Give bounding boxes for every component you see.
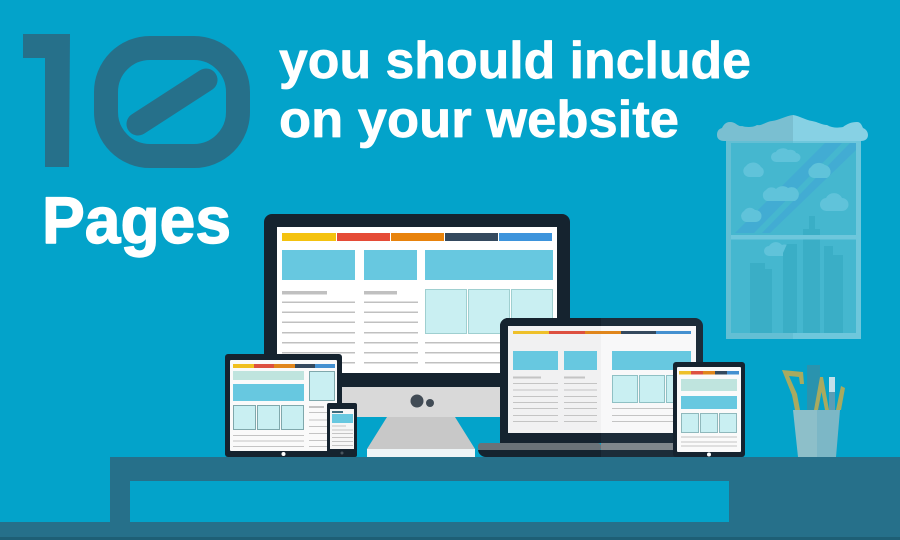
- nav orange: [391, 233, 444, 241]
- box 3: [666, 376, 692, 402]
- tablet text lines: [233, 406, 335, 447]
- tablet screen: [230, 360, 337, 451]
- nav yellow: [282, 233, 336, 241]
- stand: [367, 417, 475, 449]
- window frame: [726, 141, 861, 339]
- nav navy: [445, 233, 498, 241]
- phone body: [327, 403, 357, 457]
- city buildings: [750, 216, 843, 334]
- pencil cup: [782, 365, 845, 457]
- slash in 0: [138, 80, 206, 124]
- tablet gallery boxes: [682, 414, 736, 432]
- nav orange: [585, 331, 621, 334]
- tablet nav bar: [679, 371, 739, 374]
- subhead 2: [364, 291, 397, 294]
- blue block: [233, 384, 304, 401]
- navigation bar: [282, 233, 552, 241]
- phone screen: [330, 409, 354, 449]
- laptop lid: [500, 318, 703, 443]
- marker cap: [829, 377, 835, 392]
- nav red: [691, 371, 703, 374]
- building 3: [803, 216, 820, 334]
- cup left: [793, 410, 817, 457]
- side box: [310, 372, 334, 400]
- laptop: [478, 318, 703, 457]
- nav navy: [715, 371, 727, 374]
- nav yellow: [233, 364, 254, 368]
- window with city view: [717, 115, 868, 339]
- block 3: [612, 351, 691, 370]
- phone top bar: [332, 411, 343, 413]
- phone button: [340, 452, 344, 454]
- gallery boxes: [426, 290, 552, 334]
- monitor screen: [277, 227, 557, 373]
- tablet nav bar: [233, 364, 335, 368]
- sky clouds: [741, 148, 849, 256]
- box 2: [468, 290, 510, 334]
- box 3: [282, 406, 304, 430]
- block 2: [564, 351, 597, 370]
- green block: [233, 371, 304, 380]
- box 2: [258, 406, 280, 430]
- laptop hinge left: [478, 443, 601, 451]
- nav yellow: [679, 371, 691, 374]
- laptop hinge right: [601, 443, 681, 451]
- set square: [782, 370, 804, 410]
- box 3: [720, 414, 736, 432]
- digit 0: [106, 48, 238, 156]
- block 1: [513, 351, 558, 370]
- desk shadow strip: [0, 537, 900, 540]
- window mid bar: [731, 235, 856, 240]
- snow on window right: [793, 115, 868, 141]
- compass: [814, 377, 829, 410]
- laptop lid left shade: [500, 318, 601, 443]
- laptop base left: [478, 450, 601, 457]
- cloud 6: [741, 208, 762, 222]
- pencil: [836, 386, 845, 410]
- big number 10: [23, 34, 238, 167]
- tablet screen: [677, 367, 741, 452]
- desktop monitor: [264, 214, 570, 457]
- block 1: [282, 250, 355, 280]
- right tablet: [673, 362, 745, 457]
- tablet body: [673, 362, 745, 457]
- cloud 3: [808, 163, 831, 178]
- header blocks: [282, 250, 553, 280]
- cloud 4: [763, 186, 799, 201]
- tablet body: [225, 354, 342, 457]
- nav blue: [656, 331, 691, 334]
- nav orange: [274, 364, 295, 368]
- camera dot large: [410, 394, 424, 408]
- cloud 1: [743, 162, 764, 177]
- nav yellow: [513, 331, 549, 334]
- building 1: [750, 263, 772, 334]
- cloud 2: [771, 148, 800, 162]
- laptop screen left half: [508, 326, 601, 433]
- box 3: [512, 290, 552, 334]
- building 2: [783, 244, 797, 334]
- nav red: [549, 331, 585, 334]
- cloud 5: [820, 193, 849, 211]
- green block: [681, 379, 737, 391]
- box 1: [234, 406, 256, 430]
- heading: Pages: Pages: [42, 183, 231, 257]
- snow on window left: [717, 115, 793, 141]
- monitor chin: [264, 387, 570, 417]
- stand base: [367, 449, 475, 457]
- digit 1: [23, 34, 70, 167]
- laptop header blocks: [513, 351, 691, 370]
- box 1: [682, 414, 698, 432]
- block 2: [364, 250, 417, 280]
- nav blue: [315, 364, 335, 368]
- phone: [327, 403, 357, 457]
- nav navy: [295, 364, 315, 368]
- heading: you should include on your website: [279, 32, 751, 149]
- nav blue: [727, 371, 739, 374]
- window frame shade: [726, 141, 793, 339]
- box 2: [700, 414, 718, 432]
- left tablet: [225, 354, 342, 457]
- phone text lines: [332, 426, 353, 446]
- laptop gallery boxes: [612, 376, 692, 402]
- camera dot small: [426, 399, 434, 407]
- block 3: [425, 250, 553, 280]
- ruler: [807, 365, 820, 410]
- nav red: [337, 233, 390, 241]
- box 2: [640, 376, 664, 402]
- nav blue: [499, 233, 552, 241]
- laptop text lines: [513, 376, 677, 422]
- nav navy: [621, 331, 656, 334]
- desk: [0, 457, 900, 540]
- laptop base right: [601, 450, 681, 457]
- laptop nav bar: [513, 331, 691, 334]
- heading line 2: on your website: [279, 91, 679, 149]
- phone blue block: [332, 414, 353, 423]
- window glass: [731, 143, 856, 334]
- box 1: [612, 376, 638, 402]
- subhead 1: [282, 291, 327, 294]
- tablet button: [707, 452, 711, 456]
- column lines: [282, 302, 505, 364]
- nav red: [254, 364, 274, 368]
- cup right: [817, 410, 840, 457]
- blue block: [681, 396, 737, 409]
- glass reflection: [735, 143, 856, 233]
- tablet gallery boxes: [234, 406, 304, 430]
- cloud 7: [764, 242, 791, 256]
- marker: [829, 377, 835, 410]
- building 4: [824, 246, 843, 334]
- monitor bezel: [264, 214, 570, 387]
- tablet text lines: [681, 436, 737, 446]
- heading line 1: you should include: [279, 32, 751, 90]
- text lines: [282, 291, 505, 364]
- box 1: [426, 290, 466, 334]
- nav orange: [703, 371, 715, 374]
- laptop screen: [508, 326, 696, 433]
- tablet button: [282, 452, 286, 456]
